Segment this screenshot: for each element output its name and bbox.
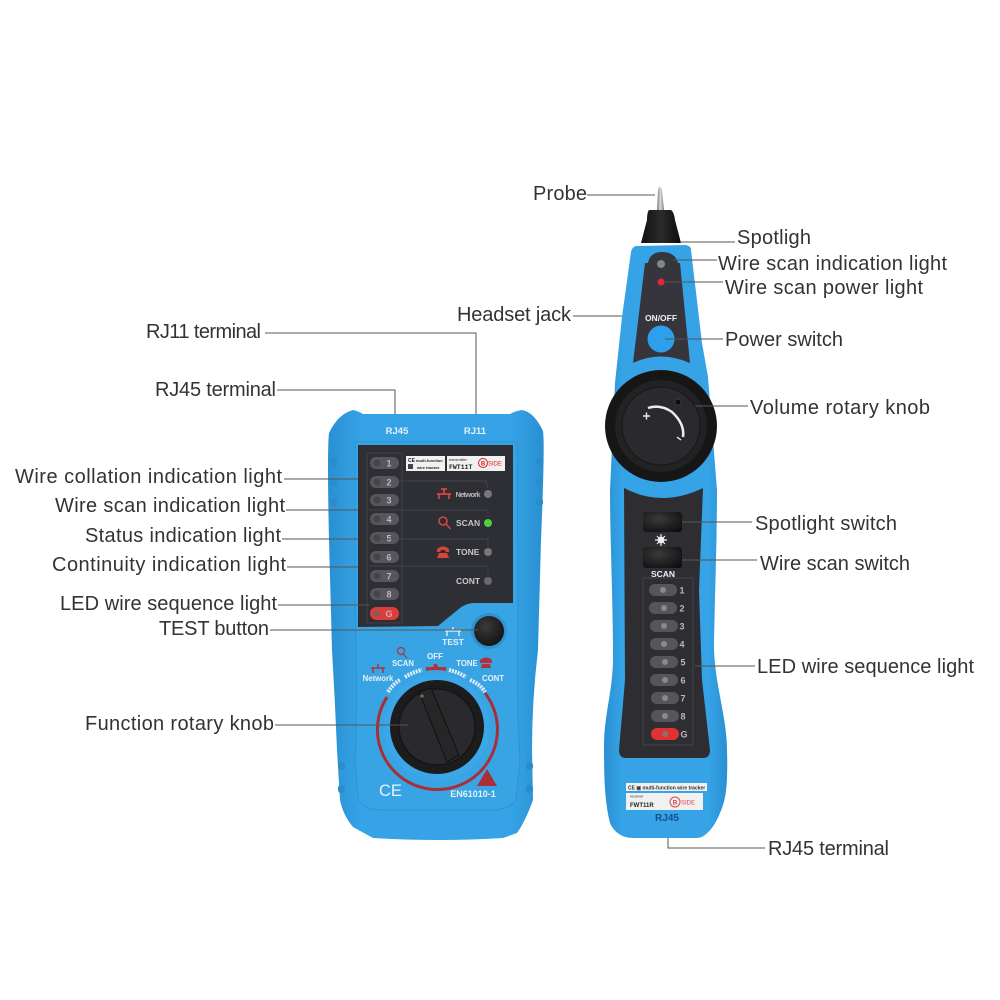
label: wire collation: Wire collation indication light — [15, 466, 282, 488]
led wire sequence: 6 — [680, 676, 686, 686]
label: rj11 terminal: RJ11 terminal — [146, 321, 261, 343]
wire scan switch — [643, 547, 682, 568]
power button — [648, 326, 674, 352]
receiver label: B — [673, 800, 678, 806]
lower control panel — [619, 488, 710, 758]
receiver label: CE ▣ multi-function wire tracker — [628, 786, 705, 792]
led wire sequence: 1 — [679, 586, 685, 596]
label: spotlight: Spotligh — [737, 227, 811, 249]
volume rotary knob — [605, 370, 717, 482]
function dial scale: Network — [363, 674, 394, 683]
status indicators — [369, 481, 492, 586]
status indicators: CONT — [456, 576, 481, 586]
test button: TEST — [442, 637, 465, 647]
label: probe: Probe — [533, 183, 587, 205]
icon: sun — [655, 534, 667, 546]
probe cone — [641, 210, 681, 243]
label: wire scan: Wire scan indication light — [55, 495, 285, 517]
function dial scale — [363, 648, 504, 692]
wire sequence pills: G — [385, 609, 393, 619]
led wire sequence: 7 — [680, 694, 686, 704]
transmitter body — [328, 410, 544, 840]
function dial scale: CONT — [482, 674, 504, 683]
receiver label: SIDE — [681, 800, 695, 806]
product label — [406, 456, 505, 471]
label: power switch: Power switch — [725, 329, 843, 351]
wire scan power led — [658, 278, 664, 286]
lower front plate — [355, 442, 520, 810]
label: spotlight switch: Spotlight switch — [755, 513, 897, 535]
scan text: SCAN — [651, 569, 675, 579]
led wire sequence: 3 — [679, 622, 685, 632]
label: rj45 terminal: RJ45 terminal — [155, 379, 276, 401]
wire sequence pills: 4 — [386, 514, 392, 524]
label: wire scan indication: Wire scan indication light — [718, 253, 947, 275]
led wire sequence: G — [680, 730, 688, 740]
wire sequence pills: 6 — [386, 552, 392, 562]
receiver body — [604, 245, 727, 838]
callout labels: receiver — [457, 183, 974, 860]
RJ45 port label: RJ45 — [386, 426, 409, 437]
wire sequence pills: 5 — [386, 534, 392, 544]
label: wire scan switch: Wire scan switch — [760, 553, 910, 575]
status indicators: SCAN — [456, 518, 480, 528]
RJ11 port label: RJ11 — [464, 426, 487, 437]
function dial scale: TONE — [456, 659, 478, 668]
icon: telephone — [437, 546, 449, 558]
wire sequence pills — [367, 453, 402, 623]
status indicators: Network — [456, 490, 481, 499]
function dial scale: SCAN — [392, 659, 414, 668]
label: rj45 terminal: RJ45 terminal — [768, 838, 889, 860]
callout labels: transmitter — [15, 321, 286, 735]
warning triangle — [477, 769, 497, 786]
spotlight switch — [643, 512, 682, 532]
led wire sequence: 2 — [679, 604, 685, 614]
product label: CE — [408, 458, 416, 464]
led wire sequence: 4 — [679, 640, 685, 650]
standard text: EN61010-1 — [450, 789, 496, 799]
function dial scale: OFF — [427, 652, 443, 661]
wire sequence pills: 3 — [386, 496, 392, 506]
device: transmitter FWT11T — [328, 410, 544, 840]
label: led sequence: LED wire sequence light — [757, 656, 974, 678]
product label: B — [481, 462, 486, 468]
wire sequence pills: 7 — [386, 572, 392, 582]
probe pin — [657, 186, 664, 210]
wire scan indication led — [657, 260, 665, 268]
label: headset jack: Headset jack — [457, 304, 572, 326]
label: continuity: Continuity indication light — [52, 554, 286, 576]
wire sequence pills: 8 — [386, 590, 392, 600]
led wire sequence: 5 — [680, 658, 686, 668]
receiver label: FWT11R — [630, 803, 654, 809]
function rotary knob — [377, 674, 497, 790]
wire sequence pills: 1 — [386, 458, 392, 468]
product label: multi-function — [416, 458, 443, 463]
icon: network — [437, 489, 451, 499]
led wire sequence — [643, 578, 693, 745]
test button — [442, 613, 507, 649]
label: led sequence: LED wire sequence light — [60, 593, 277, 615]
receiver label — [626, 783, 707, 810]
icon: magnifier — [439, 517, 450, 529]
status indicators: TONE — [456, 547, 480, 557]
label: volume knob: Volume rotary knob — [750, 397, 930, 419]
upper control panel — [633, 252, 690, 363]
product label: SIDE — [488, 462, 502, 468]
label: test button: TEST button — [159, 618, 269, 640]
label: function knob: Function rotary knob — [85, 713, 274, 735]
label: status: Status indication light — [85, 525, 281, 547]
led wire sequence: 8 — [680, 712, 686, 722]
device: receiver FWT11R — [604, 186, 727, 838]
indicator panel — [358, 445, 513, 627]
product label: FWT11T — [449, 464, 473, 471]
product label: wire tracker — [416, 465, 440, 470]
side grip notches — [330, 458, 543, 793]
on/off text: ON/OFF — [645, 313, 677, 323]
receiver label: receiver — [630, 794, 644, 798]
label: wire scan power: Wire scan power light — [725, 277, 923, 299]
wire sequence pills: 2 — [386, 478, 392, 488]
leader lines — [265, 195, 765, 848]
CE mark: CE — [379, 782, 402, 800]
product label: transmitter — [449, 458, 468, 462]
receiver RJ45 text: RJ45 — [655, 813, 679, 824]
